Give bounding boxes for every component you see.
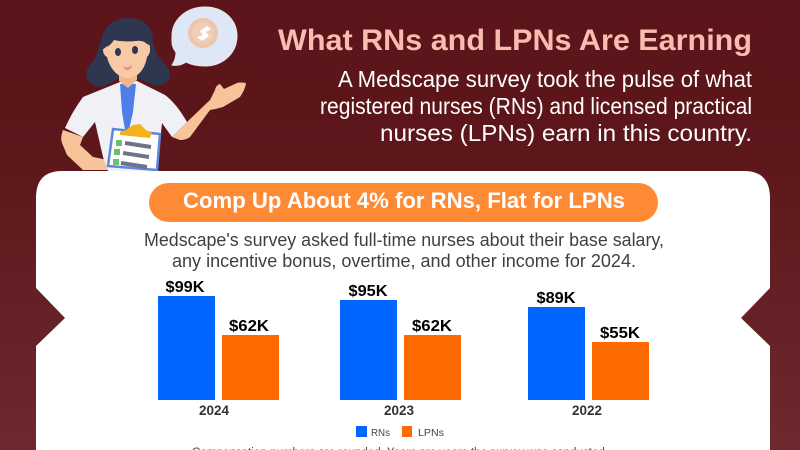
bar chart: $62K bbox=[412, 318, 452, 335]
description text: Medscape's survey asked full-time nurses about their base salary, bbox=[144, 230, 664, 250]
intro text: nurses (LPNs) earn in this country. bbox=[380, 120, 752, 146]
legend bbox=[356, 426, 444, 439]
heading pill: Comp Up About 4% for RNs, Flat for LPNs bbox=[183, 188, 625, 213]
bar chart: $99K bbox=[166, 279, 205, 296]
blue shirt bbox=[120, 84, 136, 130]
panel: compensation card bbox=[36, 171, 770, 450]
illustration: nurse with clipboard bbox=[61, 7, 246, 171]
intro text: registered nurses (RNs) and licensed practical bbox=[320, 93, 752, 119]
face bbox=[103, 36, 150, 78]
icon: speech bubble with dollar coin bbox=[172, 7, 237, 66]
heading pill bbox=[149, 183, 658, 222]
title: What RNs and LPNs Are Earning bbox=[278, 24, 752, 57]
description text bbox=[144, 230, 664, 271]
legend: LPNs bbox=[418, 427, 444, 439]
coat bbox=[65, 81, 187, 171]
intro text: A Medscape survey took the pulse of what bbox=[338, 66, 753, 92]
right arm bbox=[172, 82, 246, 140]
neck bbox=[119, 70, 137, 88]
bar chart bbox=[158, 279, 649, 439]
clipboard bbox=[108, 124, 160, 170]
legend: RNs bbox=[371, 427, 390, 439]
bar chart: 2022 bbox=[572, 403, 602, 418]
bar chart: 2023 bbox=[384, 403, 415, 418]
eyes and mouth bbox=[115, 46, 138, 70]
hair front bbox=[101, 18, 153, 50]
bar chart: $95K bbox=[348, 283, 388, 300]
intro text bbox=[320, 66, 753, 146]
bar chart: 2024 bbox=[199, 403, 230, 418]
hair back bbox=[86, 37, 170, 87]
left arm bbox=[61, 130, 112, 170]
bar chart: $62K bbox=[229, 318, 269, 335]
bar chart: $55K bbox=[600, 325, 640, 342]
description text: any incentive bonus, overtime, and other income for 2024. bbox=[172, 251, 636, 271]
bar chart: $89K bbox=[536, 290, 576, 307]
